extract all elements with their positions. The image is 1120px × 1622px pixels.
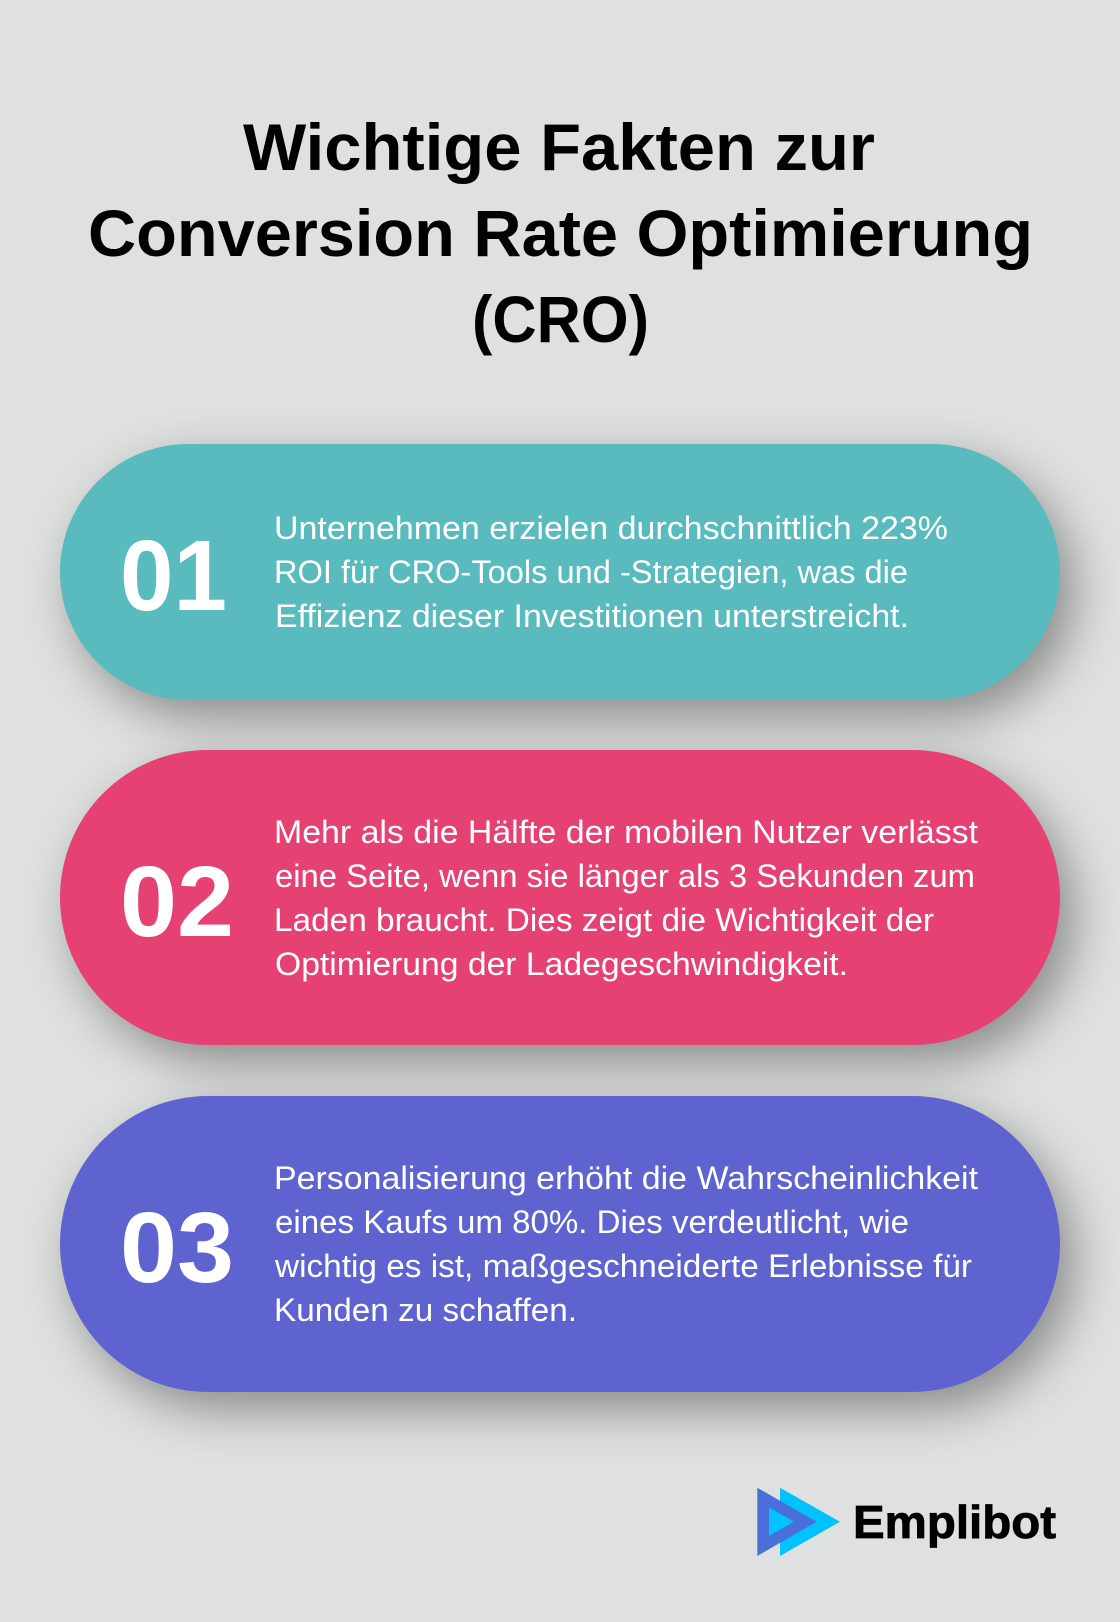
panel: fact 02 <box>60 750 1060 1045</box>
number 01: 01 <box>120 520 227 632</box>
title: Wichtige Fakten zur <box>243 110 875 184</box>
text: fact 03: eines Kaufs um 80%. Dies verdeutlicht, wie <box>275 1204 909 1240</box>
logo: Emplibot <box>757 1488 1056 1556</box>
panel: fact 03 <box>60 1096 1060 1392</box>
text: fact 01: ROI für CRO-Tools und -Strategien, was die <box>274 554 908 590</box>
icon: play triangles <box>757 1488 840 1556</box>
text: fact 03 <box>274 1160 978 1328</box>
panel: fact 01 <box>60 444 1060 700</box>
title <box>88 110 1033 356</box>
title: (CRO) <box>472 282 649 356</box>
number 03: 03 <box>120 1192 234 1304</box>
number 02: 02 <box>120 846 234 958</box>
title: Conversion Rate Optimierung <box>88 196 1033 270</box>
text: fact 02: Laden braucht. Dies zeigt die Wichtigkeit der <box>274 902 934 938</box>
text: fact 02 <box>274 814 978 982</box>
text: fact 02: Optimierung der Ladegeschwindigkeit. <box>275 946 848 982</box>
text: fact 02: Mehr als die Hälfte der mobilen Nutzer verlässt <box>274 814 978 850</box>
text: fact 03: Personalisierung erhöht die Wahrscheinlichkeit <box>274 1160 978 1196</box>
text: fact 02: eine Seite, wenn sie länger als 3 Sekunden zum <box>275 858 975 894</box>
wordmark: Emplibot <box>853 1496 1056 1548</box>
text: fact 01: Unternehmen erzielen durchschnittlich 223% <box>274 510 948 546</box>
text: fact 01: Effizienz dieser Investitionen unterstreicht. <box>275 598 909 634</box>
text: fact 01 <box>274 510 948 634</box>
text: fact 03: Kunden zu schaffen. <box>274 1292 577 1328</box>
text: fact 03: wichtig es ist, maßgeschneiderte Erlebnisse für <box>274 1248 972 1284</box>
